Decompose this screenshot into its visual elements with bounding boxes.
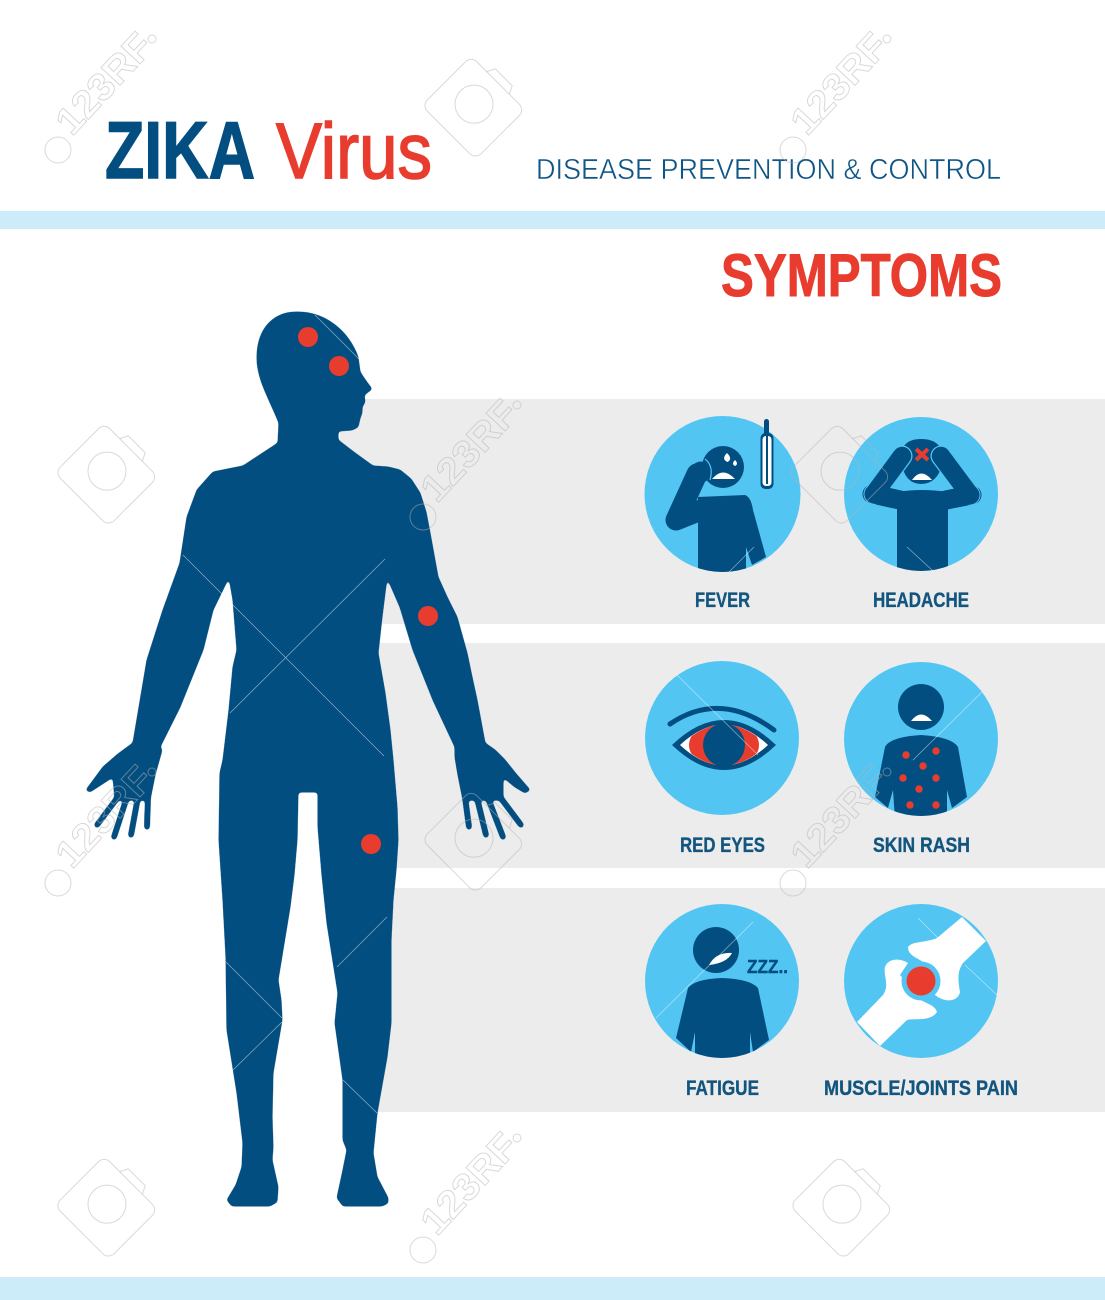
- icon: fatigue: ZZZ..: [747, 957, 788, 977]
- stock watermark: 123RF: [413, 392, 527, 510]
- label: muscle and joints pain: MUSCLE/JOINTS PAIN: [824, 1077, 1018, 1100]
- icon: skin rash: [844, 662, 998, 820]
- icon: fever: [644, 416, 800, 575]
- icon: headache: [844, 417, 998, 575]
- human body silhouette: [86, 312, 530, 1206]
- title: [105, 106, 432, 196]
- pain point: temple: [329, 356, 349, 376]
- icon: muscle and joint pain: [844, 904, 998, 1058]
- panel: fatigue and joint pain row: [360, 888, 1105, 1112]
- title: Virus: [276, 106, 432, 195]
- label: fever: FEVER: [695, 589, 750, 612]
- pain point: head: [298, 327, 318, 347]
- panel: fever and headache row: [340, 399, 1105, 624]
- pain point: thigh: [361, 834, 381, 854]
- icon: red eyes: [645, 661, 799, 815]
- icon: thermometer: [760, 419, 774, 489]
- label: skin rash: SKIN RASH: [873, 834, 970, 857]
- icon: fatigue: [645, 904, 799, 1065]
- top band: [0, 211, 1105, 229]
- panel: red eyes and skin rash row: [360, 643, 1105, 868]
- stock watermark: 123RF: [413, 1125, 527, 1243]
- label: fatigue: FATIGUE: [686, 1077, 759, 1100]
- stock watermark: 123RF: [783, 758, 897, 876]
- label: headache: HEADACHE: [873, 589, 969, 612]
- pain point: elbow: [418, 606, 438, 626]
- heading: symptoms: SYMPTOMS: [721, 242, 1002, 309]
- title: ZIKA: [105, 106, 255, 196]
- stock watermark: 123RF: [48, 25, 162, 143]
- subtitle: DISEASE PREVENTION & CONTROL: [536, 154, 1001, 186]
- stock watermark: 123RF: [48, 758, 162, 876]
- bottom band: [0, 1277, 1105, 1300]
- label: red eyes: RED EYES: [680, 834, 765, 857]
- stock watermark: 123RF: [783, 25, 897, 143]
